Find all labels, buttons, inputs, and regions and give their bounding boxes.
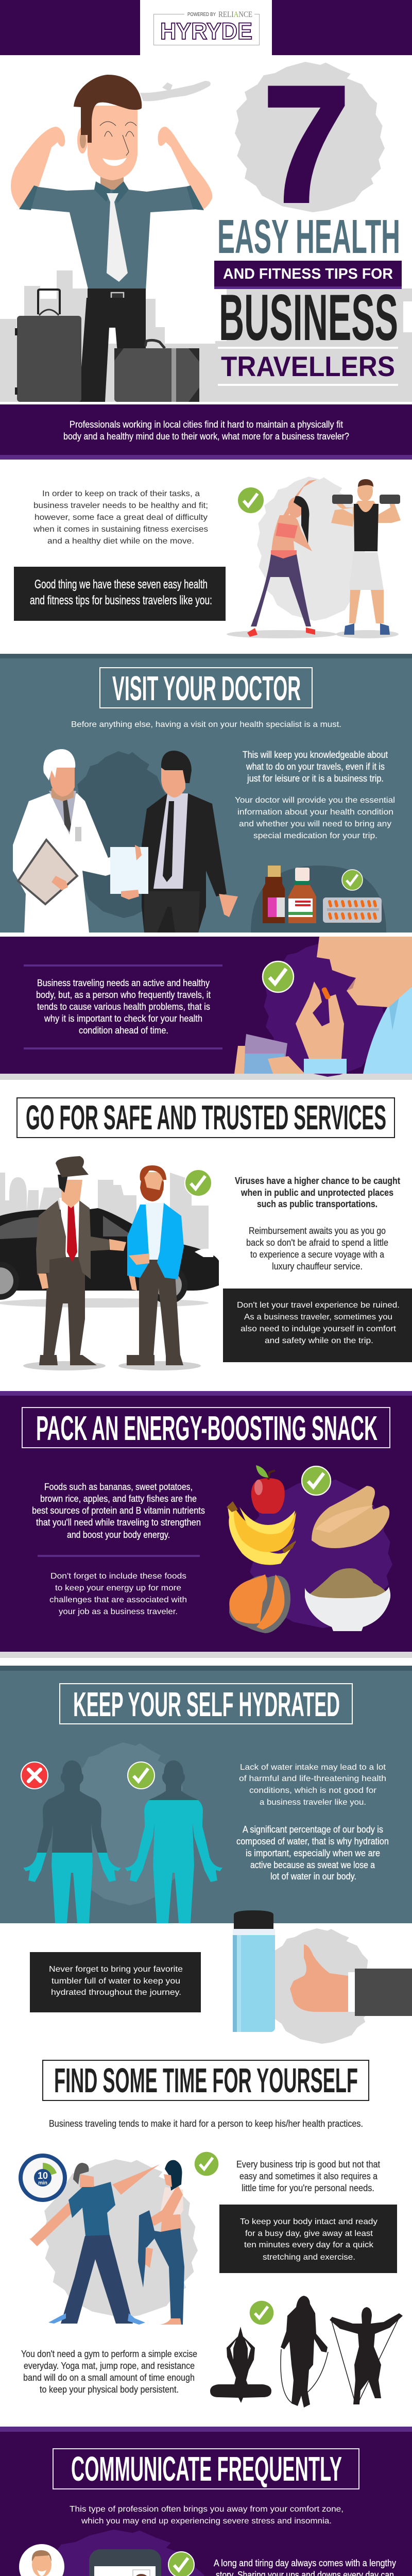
- icon: check mark: [342, 870, 363, 890]
- bananas: [227, 1501, 296, 1565]
- text block: reimbursement: back so don't be afraid to spend a little: [246, 1238, 388, 1248]
- illustration: doctor and patient: [13, 749, 238, 933]
- hero illustration: plane: [140, 81, 211, 101]
- text block: doctor: Your doctor will provide you the essential: [235, 796, 395, 805]
- intro text: when it comes in sustaining fitness exercises: [33, 525, 208, 534]
- text block: body water: active because as sweat we lose a: [250, 1860, 375, 1870]
- callout: tumbler: [30, 1952, 201, 2012]
- bottle two: [288, 868, 316, 923]
- illustration: video call: [19, 2530, 217, 2576]
- intro text: This type of profession often brings you away from your comfort zone,: [70, 2505, 344, 2514]
- man stretching: [29, 2163, 160, 2325]
- icon: check mark: [263, 961, 294, 992]
- text block: no gym needed: You don't need a gym to perform a simple excise: [21, 2349, 197, 2359]
- callout: ten minutes: stretching and exercise.: [263, 2253, 355, 2262]
- resistance band silhouette: [330, 2307, 403, 2404]
- text block: reimbursement: Reimbursement awaits you as you go: [249, 1226, 386, 1236]
- heading: [100, 668, 312, 708]
- illustration: man taking a pill: [234, 937, 412, 1077]
- panel: keep your self hydrated: [0, 1666, 412, 1923]
- intro text: however, some face a great deal of difficulty: [35, 513, 208, 522]
- text block: body water: is important, especially when we are: [246, 1848, 380, 1858]
- text block: lack of water: a business traveler like you.: [260, 1798, 366, 1807]
- text block: condition ahead of time.: [79, 1025, 168, 1036]
- hero title: AND FITNESS TIPS FOR: [223, 266, 393, 282]
- text block: foods: Foods such as bananas, sweet potatoes,: [44, 1482, 193, 1492]
- text block: body water: composed of water, that is why hydration: [236, 1836, 389, 1846]
- intro band: Professionals working in local cities find it hard to maintain a physically fit: [70, 419, 343, 430]
- text block: knowledge: what to do on your travels, even if it is: [246, 761, 385, 772]
- man lifting dumbbells: [331, 479, 401, 635]
- text block: why it is important to check for your health: [44, 1013, 202, 1024]
- salmon: [229, 1574, 290, 1633]
- dehydrated body: [23, 1760, 121, 1923]
- phone and hand: [80, 2549, 217, 2576]
- text block: foods: best sources of protein and B vitamin nutrients: [32, 1505, 205, 1516]
- blister pack: [323, 897, 382, 923]
- jump rope silhouette: [281, 2296, 328, 2408]
- text block: body, but, as a person who frequently travels, it: [36, 990, 211, 1000]
- yoga silhouette: [210, 2327, 271, 2403]
- text block: lack of water: of harmful and life-threatening health: [239, 1774, 386, 1783]
- text block: lengthy story: A long and tiring day always comes with a lengthy: [214, 2558, 396, 2568]
- passenger: [118, 1165, 201, 1370]
- text block: no gym needed: everyday. Yoga mat, jump rope, and resistance: [24, 2361, 195, 2371]
- logo: Hyryde: HYRYDE: [160, 18, 252, 44]
- logo: Hyryde: [153, 10, 260, 45]
- panel: pack an energy-boosting snack: [0, 1391, 412, 1658]
- callout: travel experience: Don't let your travel experience be ruined.: [237, 1301, 400, 1310]
- logo: Hyryde: POWERED BY: [187, 12, 216, 18]
- text block: foods: brown rice, apples, and fatty fishes are the: [40, 1494, 197, 1504]
- illustration: exercise silhouettes: [210, 2296, 403, 2408]
- text block: don't forget: to keep your energy up for more: [55, 1584, 181, 1592]
- callout: seven tips: and fitness tips for business travelers like you:: [30, 594, 212, 607]
- text block: personal needs: [236, 2159, 380, 2193]
- thumbs up hand: [290, 1944, 412, 2016]
- hero title: [214, 52, 402, 386]
- hero title: TRAVELLERS: [221, 350, 395, 382]
- panel: health check ahead of time: [0, 937, 412, 1080]
- doctor: [13, 749, 139, 933]
- text block: lengthy story: [214, 2558, 396, 2576]
- icon: check mark: [168, 2552, 194, 2576]
- icon: cross: [21, 1762, 48, 1789]
- header bar: [0, 0, 412, 55]
- text block: reimbursement: to experience a secure voyage with a: [250, 1249, 385, 1260]
- callout: ten minutes: To keep your body intact and ready: [240, 2217, 377, 2226]
- text block: doctor: and whether you will need to bring any: [239, 820, 391, 828]
- text block: knowledge: [243, 750, 388, 784]
- icon: ten minute timer: [19, 2154, 67, 2202]
- illustration: foods: [227, 1465, 392, 1633]
- callout: tumbler: tumbler full of water to keep you: [52, 1977, 180, 1986]
- hydrated body: [125, 1760, 222, 1923]
- intro text: business traveler needs to be healthy and fit;: [33, 501, 208, 510]
- panel: communicate frequently: [0, 2427, 412, 2576]
- illustration: stretching couple: [19, 2152, 218, 2325]
- callout: ten minutes: for a busy day, give away at least: [245, 2229, 373, 2238]
- panel: visit your doctor: Before anything else, having a visit on your health specialist is a must.: [71, 720, 341, 729]
- intro text: and a healthy diet while on the move.: [47, 537, 194, 546]
- panel: visit your doctor: [0, 654, 412, 933]
- text block: lack of water: Lack of water intake may lead to a lot: [240, 1763, 386, 1772]
- apple: [251, 1465, 285, 1514]
- text block: viruses: such as public transportations.: [257, 1199, 377, 1209]
- text block: don't forget: challenges that are associated with: [49, 1596, 187, 1604]
- text block: no gym needed: [21, 2349, 197, 2395]
- icon: ten minute timer: 10: [38, 2171, 48, 2181]
- text block: don't forget: your job as a business traveler.: [59, 1607, 178, 1616]
- person on phone screen: [94, 2570, 156, 2576]
- text block: body water: [236, 1824, 389, 1882]
- hero illustration: skyline: [0, 270, 412, 402]
- text block: don't forget: [49, 1572, 187, 1616]
- callout: tumbler: hydrated throughout the journey.: [51, 1988, 181, 1997]
- callout: seven tips: Good thing we have these seven easy health: [35, 578, 208, 591]
- callout: travel experience: and safety while on the trip.: [265, 1336, 373, 1345]
- text block: no gym needed: band will do on a small amount of time enough: [23, 2372, 195, 2383]
- icon: check mark: [185, 1170, 212, 1196]
- chauffeur: [23, 1156, 126, 1370]
- text block: no gym needed: to keep your physical body persistent.: [40, 2384, 179, 2395]
- text block: personal needs: easy and sometimes it also requires a: [239, 2171, 378, 2181]
- icon: check mark: [128, 1762, 154, 1789]
- bottle one: [263, 866, 285, 923]
- callout: ten minutes: [219, 2205, 397, 2273]
- icon: check mark: [250, 2301, 273, 2325]
- hero illustration: businessman flexing: [11, 75, 212, 402]
- text block: viruses: when in public and unprotected places: [241, 1188, 393, 1198]
- text block: personal needs: little time for you're personal needs.: [242, 2183, 374, 2193]
- intro band: body and a healthy mind due to their work, what more for a business traveler?: [63, 431, 349, 442]
- text block: body water: A significant percentage of our body is: [243, 1824, 383, 1835]
- illustration: exercising couple: [227, 477, 401, 638]
- text block: tends to cause various health problems, that is: [37, 1002, 210, 1012]
- car: [0, 1208, 219, 1304]
- illustration: dehydrated and hydrated bodies: [21, 1742, 222, 1923]
- text block: lack of water: conditions, which is not good for: [249, 1786, 377, 1795]
- text block: viruses: [235, 1176, 400, 1209]
- text block: doctor: information about your health condition: [237, 808, 393, 817]
- icon: check mark: [238, 487, 264, 513]
- callout: travel experience: also need to indulge yourself in comfort: [241, 1325, 397, 1333]
- patient: [110, 751, 238, 933]
- woman stretching: [138, 2160, 184, 2325]
- text block: Business traveling needs an active and healthy: [37, 978, 210, 988]
- text block: knowledge: just for leisure or it is a business trip.: [247, 773, 384, 784]
- text block: [36, 978, 211, 1036]
- text block: don't forget: Don't forget to include these foods: [50, 1572, 186, 1581]
- callout: seven tips: [14, 567, 226, 621]
- text block: personal needs: Every business trip is good but not that: [236, 2159, 380, 2170]
- intro text: In order to keep on track of their tasks, a: [42, 489, 200, 498]
- text block: knowledge: This will keep you knowledgeable about: [243, 750, 388, 760]
- sweet potatoes: [312, 1486, 389, 1548]
- callout: travel experience: [223, 1289, 412, 1362]
- text block: doctor: special medication for your trip.: [253, 832, 377, 840]
- text block: foods: [32, 1482, 205, 1540]
- text: business traveling tends: Business traveling tends to make it hard for a person to keep his/her health practices.: [49, 2119, 363, 2129]
- bottle: [233, 1910, 275, 2032]
- text block: body water: lot of water in our body.: [270, 1871, 356, 1882]
- callout: tumbler: Never forget to bring your favorite: [49, 1965, 183, 1974]
- woman stretching: [247, 480, 317, 637]
- callout: ten minutes: ten minutes every day for a quick: [244, 2241, 374, 2249]
- icon: check mark: [195, 2152, 218, 2176]
- callout: travel experience: As a business traveler, sometimes you: [244, 1313, 392, 1321]
- text block: foods: and boost your body energy.: [67, 1530, 170, 1540]
- text block: reimbursement: luxury chauffeur service.: [272, 1261, 363, 1272]
- text block: foods: that you'll need while traveling to strengthen: [36, 1517, 201, 1528]
- text block: lack of water: [239, 1763, 386, 1807]
- hero illustration: suitcases: [15, 290, 199, 402]
- icon: check mark: [302, 1466, 331, 1495]
- bowl of rice: [305, 1568, 390, 1631]
- intro text: [70, 2505, 344, 2526]
- icon: ten minute timer: min: [38, 2180, 47, 2186]
- illustration: water bottle and thumbs up: [233, 1910, 412, 2044]
- illustration: medicine: [251, 866, 386, 933]
- intro band: [0, 404, 412, 460]
- intro text: [33, 489, 208, 546]
- intro text: which you may end up experiencing severe stress and insomnia.: [81, 2517, 332, 2526]
- logo: Hyryde: RELIANCE: [218, 10, 252, 19]
- big number seven: 7: [263, 52, 350, 237]
- avatar: young man: [19, 2544, 64, 2576]
- illustration: chauffeur, passenger and car: [0, 1156, 219, 1370]
- text block: reimbursement: [246, 1226, 388, 1272]
- text block: doctor: [235, 796, 395, 840]
- grey brush blob: [235, 62, 385, 212]
